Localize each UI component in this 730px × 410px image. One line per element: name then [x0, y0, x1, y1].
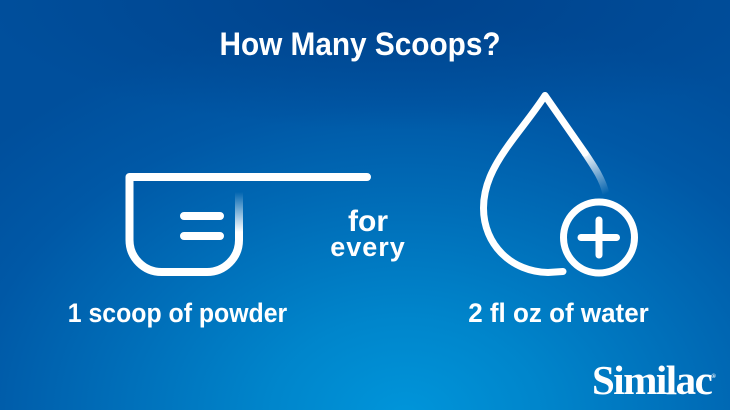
label: 1 scoop of powder: 1 scoop of powder: [68, 298, 287, 328]
title: How Many Scoops?: [219, 26, 501, 62]
label: for every: every: [330, 232, 406, 262]
label: for every: for: [348, 205, 388, 238]
label: 2 fl oz of water: 2 fl oz of water: [468, 298, 649, 328]
logo: Similac: Similac®: [592, 357, 716, 403]
label: for every: [330, 205, 406, 262]
